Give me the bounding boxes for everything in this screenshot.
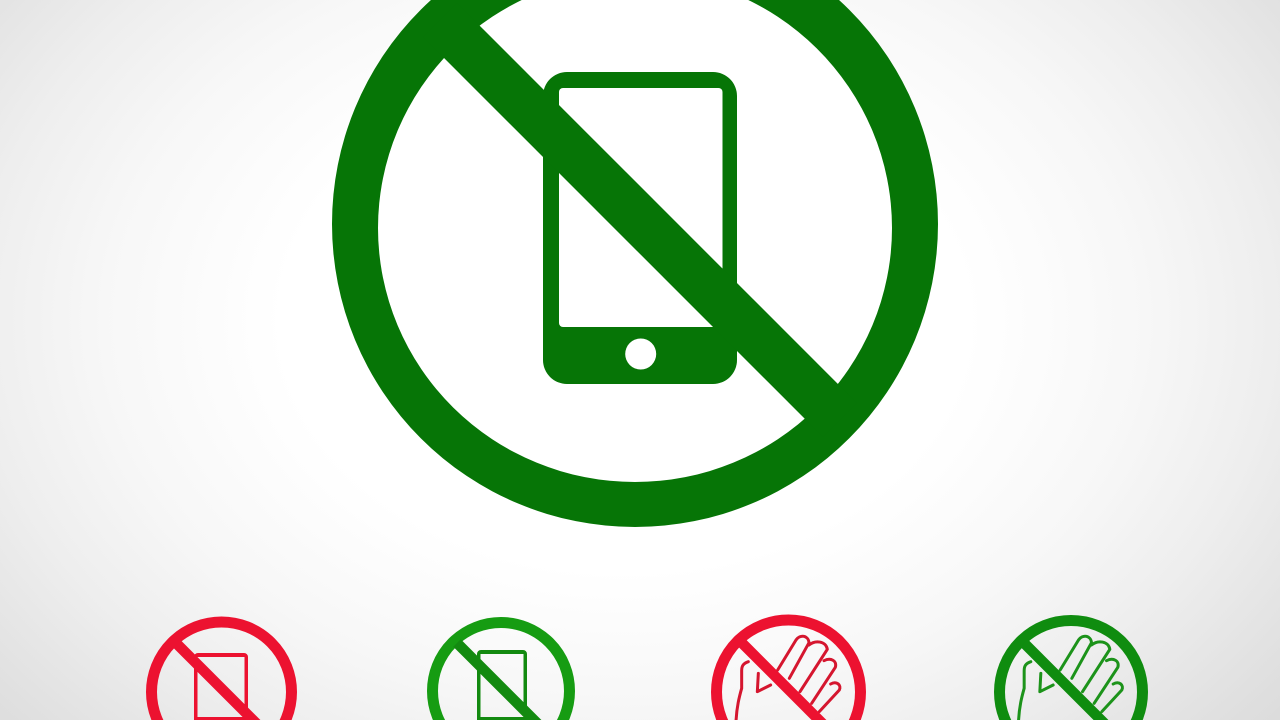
icon: small red no-phone sign bbox=[152, 622, 292, 720]
icon: large phone body bbox=[543, 72, 737, 384]
icon: small green no-hand sign bbox=[1000, 620, 1142, 720]
hand outline bbox=[1018, 636, 1122, 720]
icon: small green no-phone sign bbox=[432, 622, 570, 720]
icon: small red no-hand sign bbox=[716, 620, 860, 720]
prohibition bar bbox=[440, 20, 840, 420]
icon: large green no-phone sign bbox=[332, 0, 938, 527]
hand outline bbox=[736, 636, 840, 720]
